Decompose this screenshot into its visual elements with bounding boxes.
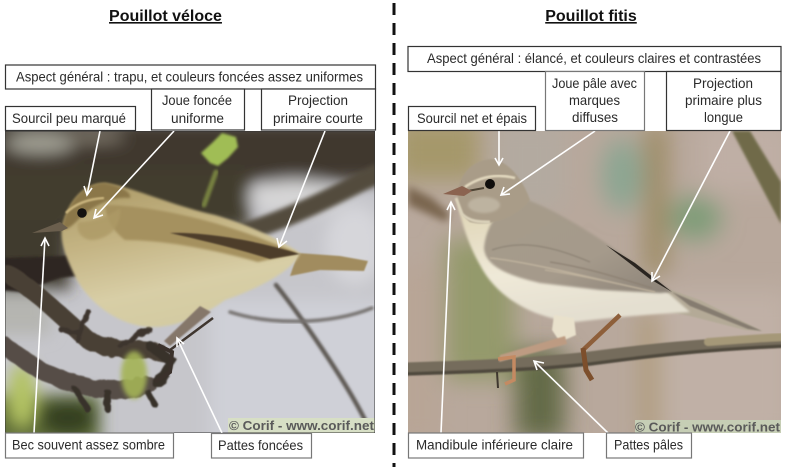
arrow: Projection — [652, 131, 730, 281]
label: Projection primaire courte: Projection — [288, 93, 348, 108]
label: Sourcil net et épais: Sourcil net et épais — [417, 111, 527, 126]
bird — [443, 159, 762, 388]
label: Mandibule inférieure claire: Mandibule inférieure claire — [416, 438, 573, 452]
arrow: Bec — [34, 238, 49, 433]
panel: Pouillot fitis — [395, 46, 790, 458]
front branches — [3, 274, 170, 410]
photo: Pouillot véloce on a branch — [5, 131, 375, 433]
title: Pouillot véloce: Pouillot véloce — [109, 8, 222, 25]
arrow: Mandibule — [441, 202, 455, 433]
watermark: © Corif - www.corif.net — [229, 418, 375, 433]
label: Projection primaire courte — [262, 89, 376, 130]
label: Sourcil peu marqué — [6, 106, 136, 130]
label: Pattes pâles — [606, 433, 692, 458]
label: Joue foncée uniforme: Joue foncée — [162, 93, 232, 108]
title: Pouillot fitis: Pouillot fitis — [545, 8, 637, 25]
label: Projection primaire courte: primaire courte — [273, 111, 363, 126]
arrow: Pattes — [534, 361, 608, 433]
label: Joue foncée uniforme: uniforme — [171, 111, 224, 126]
bird — [32, 183, 368, 382]
leaf bud — [201, 133, 238, 166]
label: Joue pâle avec marques diffuses: diffuses — [572, 110, 618, 125]
upper right branch — [732, 131, 781, 224]
label: Aspect général — [6, 65, 376, 89]
arrow: Sourcil — [495, 131, 503, 165]
distant branches — [204, 172, 380, 420]
label: Projection primaire plus longue: Projection — [693, 76, 753, 91]
label: Mandibule inférieure claire — [408, 433, 584, 458]
label: Sourcil net et épais — [408, 106, 536, 130]
label: Aspect général: Aspect général : élancé, et couleurs claires et contrastées — [427, 51, 761, 66]
arrow: Sourcil — [84, 131, 100, 195]
arrow: Pattes — [177, 338, 222, 433]
panel: Pouillot véloce — [0, 65, 400, 458]
label: Joue pâle avec marques diffuses: Joue pâle avec — [552, 76, 637, 91]
label: Bec souvent assez sombre — [6, 433, 174, 458]
label: Joue pâle avec marques diffuses — [546, 72, 644, 130]
photo: Pouillot fitis on a branch — [408, 131, 781, 433]
label: Projection primaire plus longue — [666, 72, 781, 130]
dashed central divider — [392, 3, 396, 467]
label: Pattes foncées — [212, 434, 312, 458]
arrow: Joue — [94, 131, 174, 218]
label: Joue foncée uniforme — [152, 89, 244, 130]
perch branch — [404, 337, 785, 374]
watermark: © Corif - www.corif.net — [635, 420, 781, 434]
label: Projection primaire plus longue: longue — [704, 110, 743, 125]
label: Sourcil peu marqué: Sourcil peu marqué — [12, 111, 126, 126]
label: Aspect général: Aspect général : trapu, et couleurs foncées assez uniformes — [16, 70, 363, 84]
label: Pattes foncées: Pattes foncées — [218, 438, 303, 453]
label: Bec souvent assez sombre: Bec souvent assez sombre — [12, 438, 165, 452]
label: Joue pâle avec marques diffuses: marques — [569, 93, 620, 108]
arrow: Projection — [277, 131, 325, 247]
label: Aspect général — [408, 46, 781, 72]
label: Pattes pâles: Pattes pâles — [614, 438, 683, 452]
arrow: Joue — [501, 131, 595, 195]
label: Projection primaire plus longue: primaire plus — [685, 93, 762, 108]
back branch — [6, 254, 76, 294]
